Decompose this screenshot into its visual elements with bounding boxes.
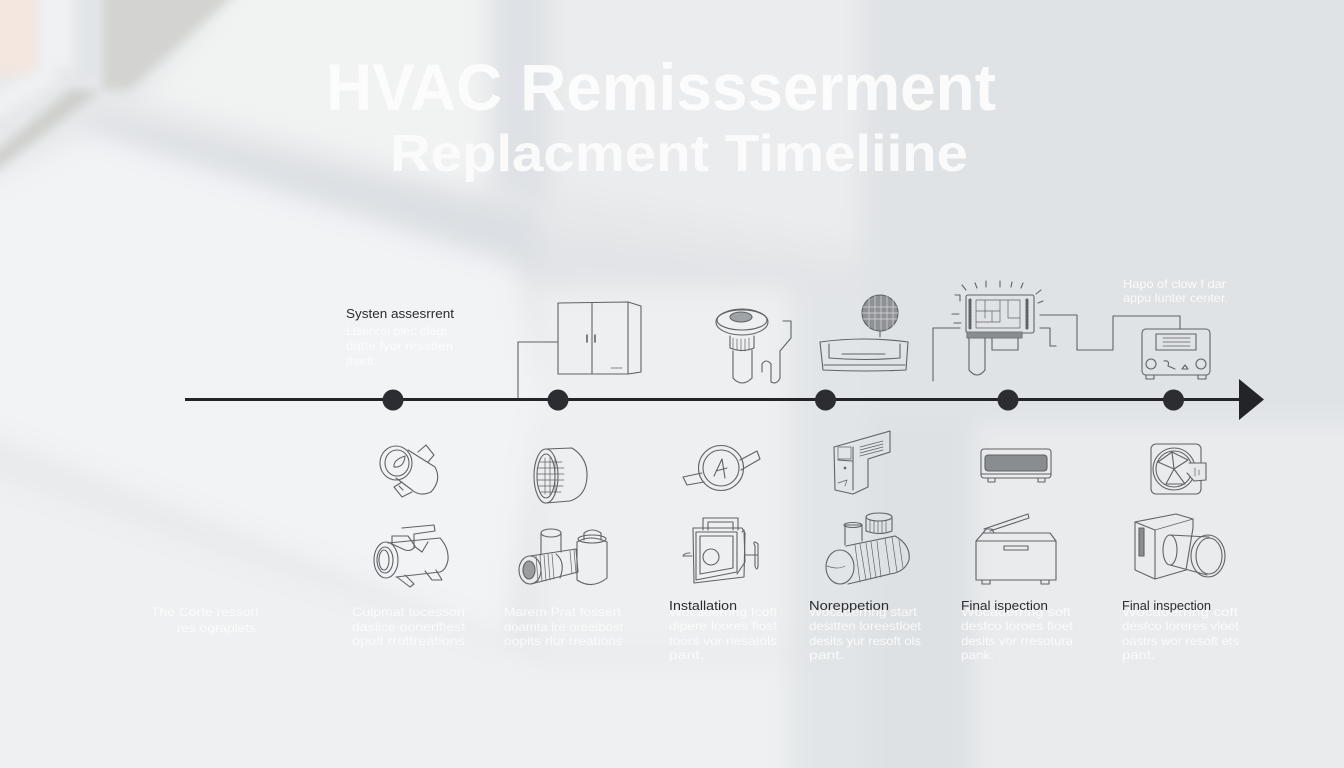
text block: system assessment: [346, 307, 455, 368]
text block: final inspection one: desits vor rresotura: [961, 634, 1073, 648]
icon: base box with lever: [976, 514, 1056, 584]
icon: control panel with rays and connectors: [933, 281, 1180, 381]
timeline arrow with step markers: [185, 379, 1264, 420]
text block: final inspection two: [1122, 599, 1240, 662]
text block: equipment selection: [352, 605, 466, 648]
title: [326, 50, 996, 183]
text block: final inspection one: [961, 599, 1074, 662]
text block: system assessment: Lisenrol plec cfegt: [346, 324, 448, 338]
text block: final inspection one: Wocaoerring soft: [961, 605, 1072, 619]
text block: final inspection two: Wocaoerring coft: [1122, 605, 1239, 619]
text block: pre-inspection: Wocaoerring start: [809, 605, 918, 619]
text block: equipment selection: daslice oonerffiest: [352, 620, 466, 634]
text block: installation: Wocaoerring fcoft: [669, 605, 778, 619]
text block: helper note: Hapo of clow f dar: [1123, 277, 1226, 291]
icon: thermostat unit: [834, 431, 890, 494]
text block: system assessment: datte fyor resstten: [346, 339, 453, 353]
icon: flat unit: [981, 449, 1051, 482]
text block: final inspection two: oastrs wor resoft ets: [1122, 634, 1239, 648]
text block: pre-inspection: desits yur resoft ols: [809, 634, 921, 648]
text block: pre-inspection: pant.: [809, 648, 844, 662]
text block: final inspection two: pant.: [1122, 648, 1155, 662]
icon: wall unit with round mesh: [820, 295, 908, 371]
icon: threaded pipe and bottle: [519, 529, 607, 585]
text block: installation: Installation: [669, 599, 737, 613]
title: HVAC Remissserment: [326, 50, 996, 124]
icon: filter cylinder: [826, 513, 909, 584]
text block: installation: pant.: [669, 648, 704, 662]
icon: control unit: [1142, 329, 1210, 379]
text block: equipment selection: Culpmat tocesson: [352, 605, 465, 619]
text block: lower-left note: res ograplets: [177, 621, 256, 635]
icon: square fan: [1151, 444, 1206, 494]
icon: duct ring: [534, 448, 587, 503]
text block: material preparation: oopits rlur rreations: [504, 634, 623, 648]
icon: box with knob: [683, 518, 758, 583]
text block: final inspection two: desfco loreres vloet: [1122, 619, 1240, 633]
text block: material preparation: doamta lre oreeibost: [504, 620, 624, 634]
text block: final inspection one: pank.: [961, 648, 994, 662]
text block: pre-inspection: desitten loreestloet: [809, 619, 922, 633]
icon: camera box: [1135, 514, 1225, 579]
text block: installation: [669, 599, 778, 662]
icon: gauge: [683, 446, 760, 490]
icon: cabinet with connector: [518, 302, 641, 398]
text block: system assessment: thartt.: [346, 354, 377, 368]
text block: system assessment: Systen assesrrent: [346, 307, 455, 321]
text block: pre-inspection: Noreppetion: [809, 599, 889, 613]
icon: valve and trap: [716, 309, 791, 383]
icon: round flange: [380, 445, 438, 497]
text block: helper note: [1123, 277, 1228, 305]
icon: compressor cylinder: [374, 525, 448, 587]
text block: final inspection one: Final ispection: [961, 599, 1048, 613]
text block: final inspection one: desfco loroes fioet: [961, 619, 1074, 633]
text block: lower-left note: The Corte ressort: [151, 605, 260, 619]
text block: installation: dipere loores flost: [669, 619, 778, 633]
text block: final inspection two: Final inspection: [1122, 599, 1211, 613]
text block: lower-left note: [151, 605, 260, 635]
title: Replacment Timeliine: [390, 125, 968, 183]
text block: material preparation: Marem Prat fossert: [504, 605, 622, 619]
text block: equipment selection: opult rrottreations: [352, 634, 465, 648]
text block: helper note: appu lunter center.: [1123, 291, 1228, 305]
text block: pre-inspection: [809, 599, 922, 662]
text block: installation: toors vor riesatols: [669, 634, 777, 648]
text block: material preparation: [504, 605, 624, 648]
